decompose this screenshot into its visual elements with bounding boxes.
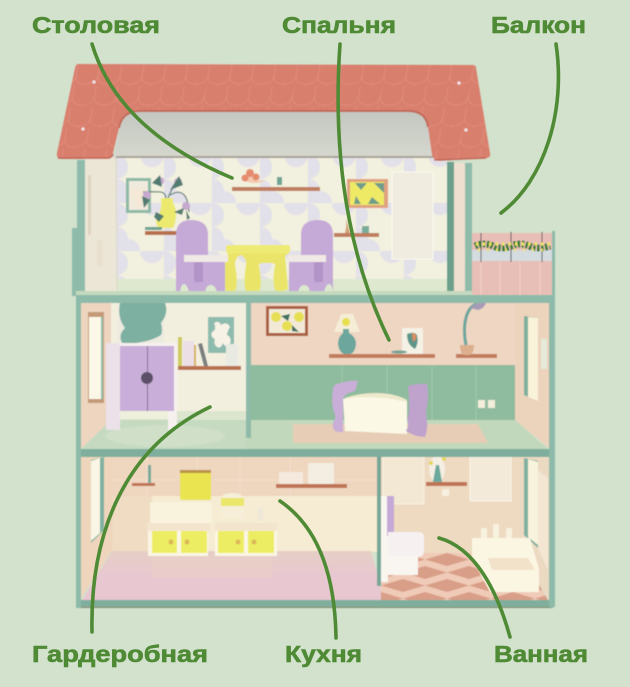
framed yellow abstract picture — [347, 179, 388, 208]
bathroom window — [524, 458, 548, 570]
wall mirror panel — [392, 172, 433, 259]
rug — [293, 424, 488, 443]
label: balcony: Балкон — [491, 12, 586, 38]
divider post — [377, 457, 381, 586]
wall sockets — [478, 400, 495, 408]
pointer line: kitchen — [280, 501, 336, 638]
right chair — [288, 220, 333, 292]
label: bedroom: Спальня — [282, 12, 396, 38]
wall shelf with flowers — [426, 456, 467, 486]
label: dining room: Столовая — [32, 12, 160, 38]
left counter — [147, 523, 210, 556]
yellow hood — [150, 470, 212, 523]
vase with flowers — [142, 175, 190, 228]
bottom floor: bathroom — [377, 456, 551, 600]
flower garland — [475, 244, 550, 250]
bottom floor: kitchen — [80, 457, 384, 600]
pointer line: bathroom — [439, 538, 510, 637]
floor slab — [76, 291, 472, 296]
dollhouse — [57, 64, 555, 608]
middle floor: bedroom — [246, 302, 549, 449]
bathroom socket — [442, 489, 449, 496]
bathroom mirror — [470, 457, 511, 501]
middle floor: wardrobe room — [81, 303, 246, 449]
wall art: leaf print — [126, 178, 151, 213]
bed — [332, 381, 428, 437]
right window — [524, 316, 547, 401]
right wall posts — [447, 162, 472, 296]
right kitchen shelf with pot — [276, 463, 347, 488]
right counter with small cupboard — [215, 493, 277, 556]
shelf with green book — [145, 227, 180, 235]
toilet — [381, 496, 424, 582]
small cup shelf — [334, 219, 379, 237]
pointer line: balcony — [501, 44, 558, 213]
top floor: dining room — [72, 111, 472, 296]
shelf with fruit and cup — [232, 169, 320, 191]
counter reflection — [152, 558, 272, 578]
label: wardrobe room: Гардеробная — [32, 641, 208, 667]
balcony — [472, 231, 555, 607]
left chair — [176, 220, 228, 292]
label: kitchen: Кухня — [285, 641, 362, 667]
kitchen window — [91, 457, 104, 543]
shelf with lamp and picture — [329, 314, 435, 358]
wardrobe — [106, 343, 177, 430]
storage cabinet — [383, 457, 424, 504]
lemon picture — [266, 306, 308, 336]
books on shelf — [178, 337, 241, 370]
roof — [57, 64, 490, 161]
pointer line: wardrobe room — [92, 407, 210, 632]
leaf poster — [118, 303, 166, 344]
under-roof grey ceiling — [113, 111, 434, 158]
left kitchen shelf — [132, 465, 155, 486]
shelf with plant — [456, 302, 497, 358]
pointer line: dining room — [92, 44, 232, 178]
floor slabs and frame — [76, 295, 554, 608]
left window — [88, 312, 104, 403]
checkered floor — [381, 553, 551, 600]
bathtub — [472, 524, 539, 592]
wall art: white leaf — [208, 317, 238, 366]
label: bathroom: Ванная — [494, 641, 588, 667]
table — [222, 245, 290, 292]
pointer line: bedroom — [338, 44, 389, 340]
